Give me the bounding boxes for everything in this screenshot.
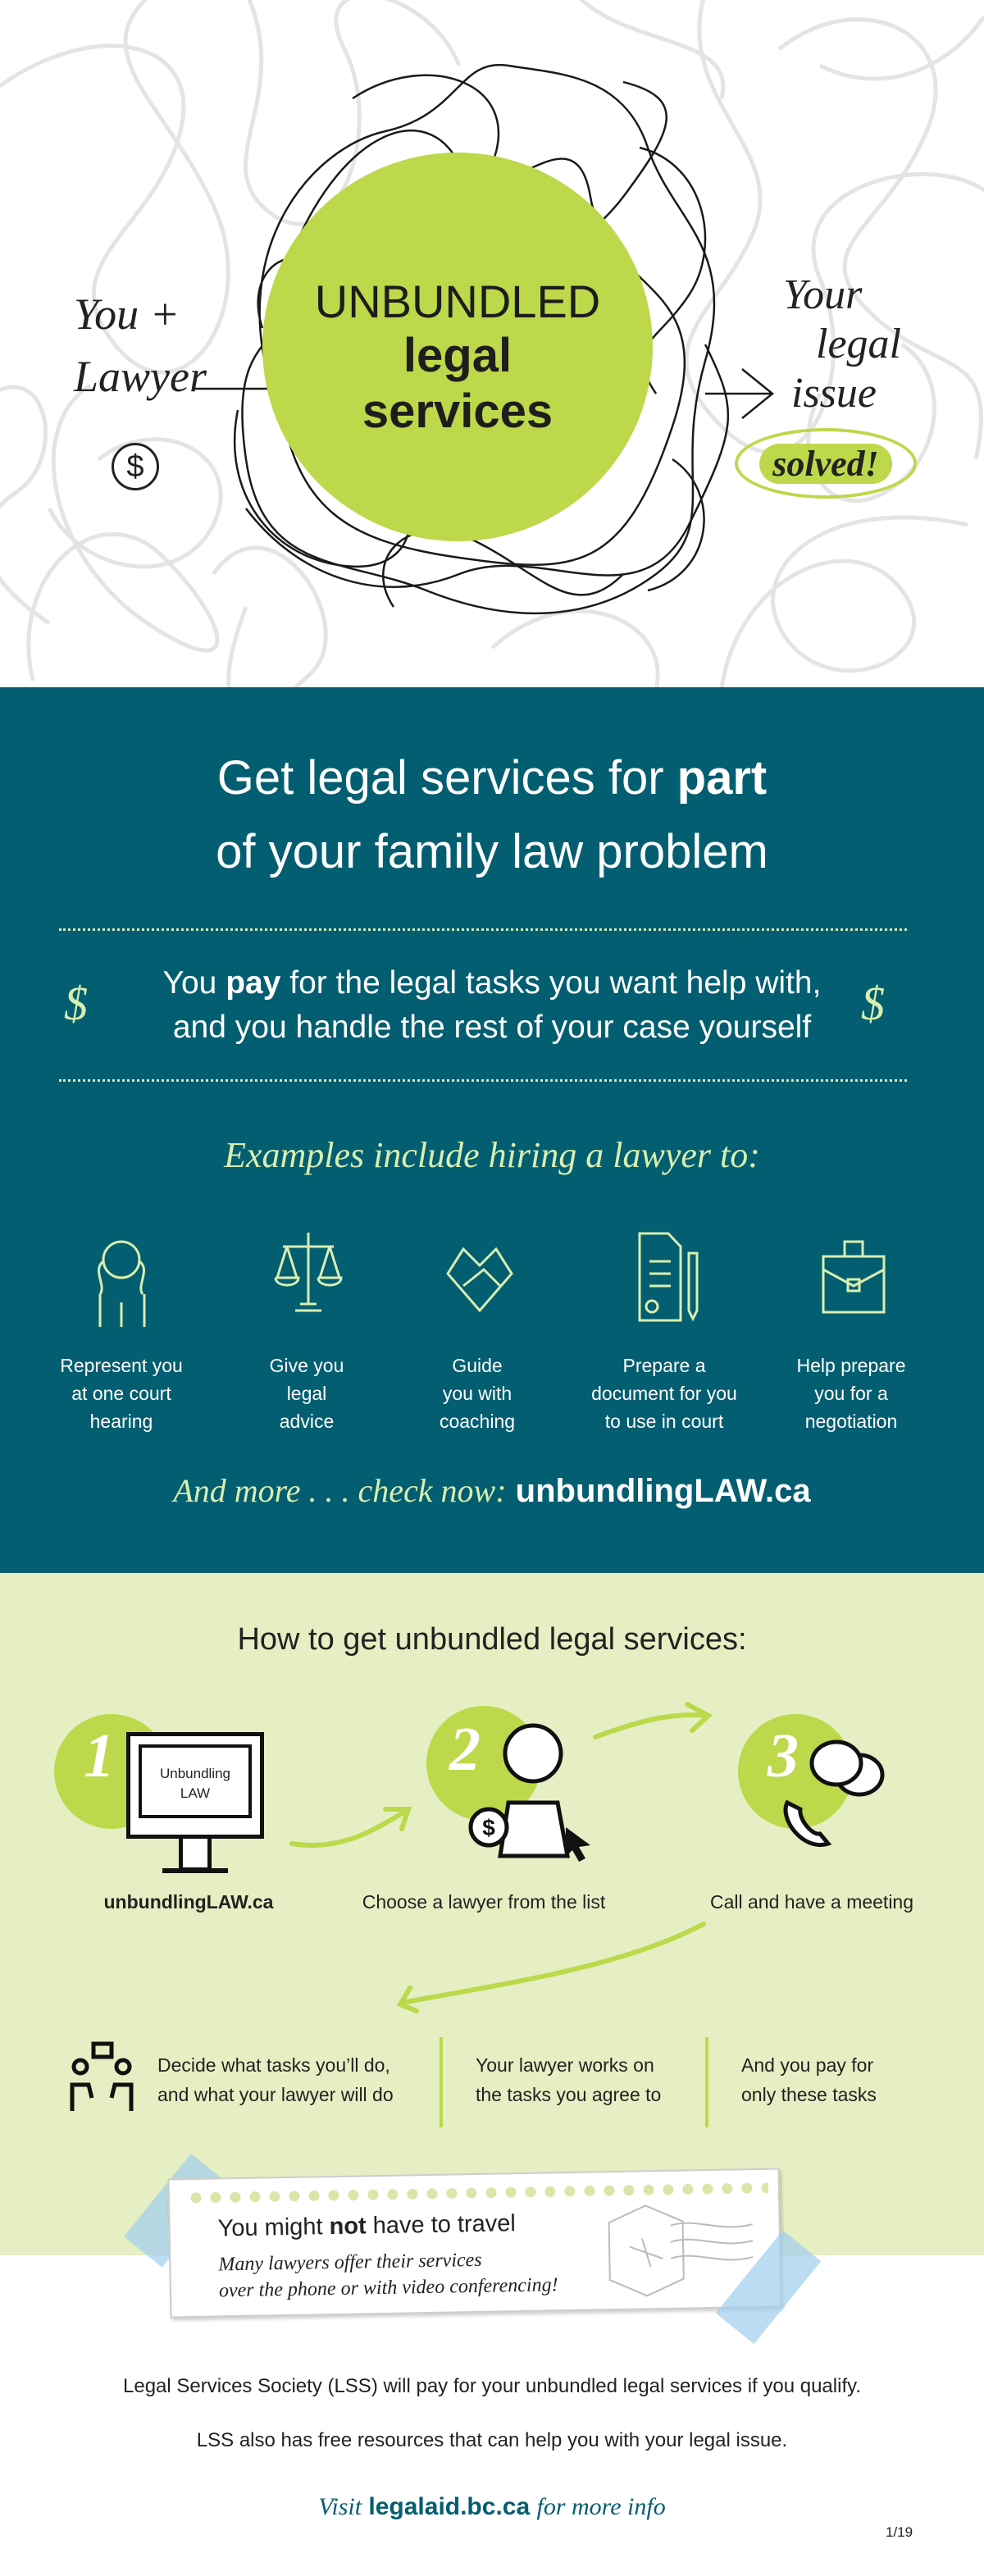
- postcard callout: [124, 2154, 822, 2344]
- black tangle: [195, 64, 774, 615]
- text: you + lawyer: [73, 290, 207, 401]
- arrow out: [705, 369, 772, 418]
- icon: scales: [276, 1233, 341, 1311]
- process row: only these tasks: [741, 2084, 877, 2105]
- examples row: coaching: [440, 1411, 515, 1432]
- process row: the tasks you agree to: [476, 2084, 661, 2105]
- icon: briefcase: [823, 1242, 884, 1312]
- examples row: Guide: [452, 1355, 503, 1376]
- icon: monitor: LAW: [180, 1785, 210, 1801]
- examples row: document for you: [591, 1383, 737, 1404]
- examples row: you with: [443, 1383, 512, 1404]
- visit link: Visit legalaid.bc.ca for more info: [318, 2493, 666, 2520]
- check now link: And more . . . check now: unbundlingLAW.ca: [173, 1472, 811, 1509]
- green circle with title: legal: [403, 329, 512, 382]
- icon: lawyer: $: [482, 1815, 495, 1840]
- heading: How to get unbundled legal services:: [237, 1622, 747, 1657]
- icon: dollar left: $: [64, 977, 88, 1030]
- dotted line top: [59, 928, 907, 931]
- examples row: you for a: [814, 1383, 888, 1404]
- examples row: [60, 1232, 905, 1432]
- heading: [216, 751, 768, 878]
- process row: and what your lawyer will do: [157, 2084, 394, 2105]
- example labels: [60, 1355, 183, 1432]
- step 1: 1: [84, 1721, 115, 1790]
- examples row: Give you: [270, 1355, 344, 1376]
- icon: monitor: Unbundling: [160, 1766, 230, 1781]
- icon: dollar right: $: [861, 977, 885, 1030]
- hero section: [0, 0, 984, 687]
- text: you + lawyer: Lawyer: [74, 352, 207, 401]
- step 1: [54, 1714, 264, 1873]
- tape right: [716, 2230, 821, 2344]
- dotted line bottom: [59, 1079, 907, 1082]
- arrows between steps: [289, 1702, 713, 2013]
- text: your legal issue solved: legal: [816, 321, 901, 367]
- text: your legal issue solved: [783, 271, 901, 417]
- pay statement: [163, 965, 821, 1045]
- icon: dollar circle: [112, 443, 159, 490]
- step labels: unbundlingLAW.ca: [103, 1891, 273, 1913]
- icon: dollar circle: $: [126, 449, 144, 484]
- text: your legal issue solved: issue: [791, 370, 877, 417]
- example labels: hearing: [90, 1411, 153, 1432]
- postcard callout: Many lawyers offer their services: [218, 2250, 482, 2275]
- light green section: Choose a lawyer from the list: [362, 1891, 605, 1913]
- process row: And you pay for: [741, 2054, 873, 2076]
- background scribbles: [0, 0, 984, 687]
- postcard callout: You might not have to travel: [217, 2210, 516, 2241]
- icon: meeting people: [71, 2042, 133, 2111]
- arrow in: [193, 388, 271, 390]
- LSS footer text: Legal Services Society (LSS) will pay for your unbundled legal services if you qualify.: [123, 2375, 861, 2397]
- examples row: negotiation: [805, 1411, 897, 1432]
- heading: of your family law problem: [216, 825, 768, 878]
- script subheading: Examples include hiring a lawyer to:: [224, 1135, 760, 1175]
- examples row: Prepare a: [622, 1355, 705, 1376]
- step 2: 2: [449, 1715, 481, 1784]
- green circle with title: [262, 153, 653, 541]
- example labels: at one court: [71, 1383, 171, 1404]
- process row: [71, 2037, 877, 2127]
- text: LSS also has free resources that can help you with your legal issue.: [197, 2429, 787, 2451]
- text: your legal issue solved: Your: [783, 271, 862, 318]
- step 3: 3: [768, 1721, 799, 1790]
- icon: document: [640, 1233, 697, 1320]
- icon: lawyer: [469, 1724, 590, 1862]
- page number: 1/19: [886, 2524, 913, 2540]
- icon: handshake: [448, 1249, 512, 1311]
- title: UNBUNDLED: [315, 276, 600, 327]
- light green section: Call and have a meeting: [710, 1891, 913, 1913]
- postcard callout: over the phone or with video conferencing!: [219, 2274, 558, 2301]
- tape left: [124, 2154, 229, 2268]
- text: you + lawyer: You +: [74, 290, 180, 339]
- examples row: advice: [280, 1411, 334, 1432]
- icon: monitor: [126, 1732, 264, 1839]
- teal section: [0, 687, 984, 1573]
- light green section: [0, 1573, 984, 2255]
- examples row: to use in court: [605, 1411, 723, 1432]
- green circle with title: services: [362, 385, 553, 438]
- pay statement: and you handle the rest of your case yourself: [173, 1010, 811, 1045]
- examples row: legal: [287, 1383, 326, 1404]
- example labels: Represent you: [60, 1355, 183, 1376]
- process row: Decide what tasks you’ll do,: [157, 2054, 390, 2076]
- step 3: [738, 1714, 884, 1847]
- heading: Get legal services for part: [217, 751, 767, 805]
- icon: phone and speech bubbles: [784, 1740, 884, 1847]
- step 2: [426, 1706, 590, 1862]
- badge: solved: solved!: [772, 444, 879, 484]
- badge: solved: [735, 428, 917, 499]
- process row: Your lawyer works on: [476, 2054, 654, 2076]
- examples row: Help prepare: [797, 1355, 905, 1376]
- pay statement: You pay for the legal tasks you want help with,: [163, 965, 821, 1001]
- icon: stamp: [608, 2204, 753, 2296]
- icon: judge: [98, 1242, 144, 1329]
